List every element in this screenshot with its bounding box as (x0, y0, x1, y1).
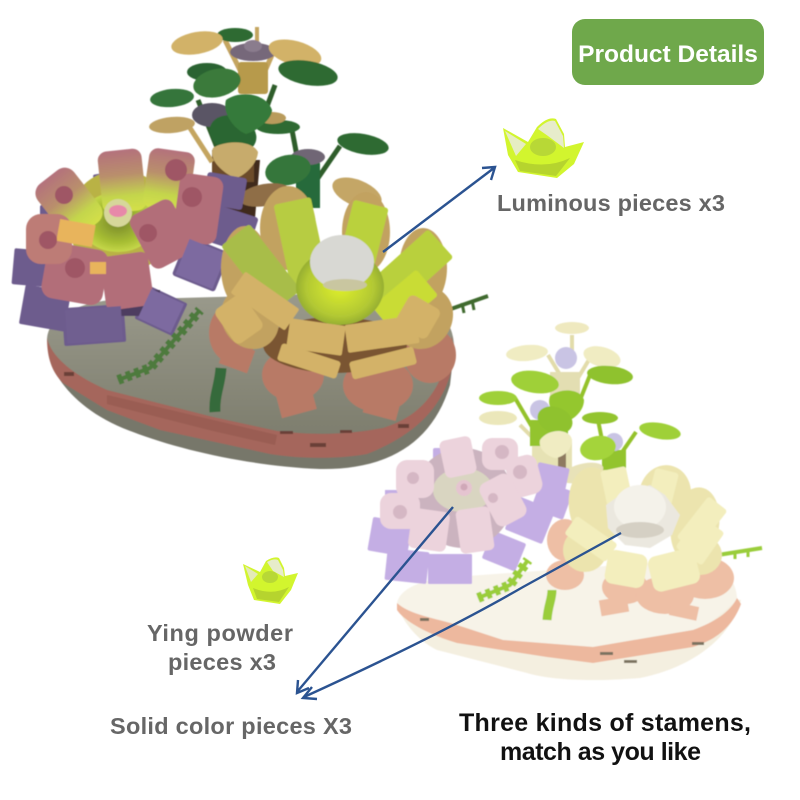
icon: luminous piece top right (503, 118, 584, 178)
label: solid color pieces: Solid color pieces X3 (110, 713, 352, 739)
pastel succulent model (367, 322, 762, 680)
pastel model: upper plant with leaves (479, 322, 682, 487)
pastel model: left pink and lavender succulent (367, 435, 573, 584)
product details badge: Product Details (578, 41, 758, 68)
note: three kinds of stamens: match as you like (500, 738, 701, 766)
pastel model: pot (397, 560, 741, 680)
label: ying powder pieces (147, 620, 293, 675)
note: three kinds of stamens: Three kinds of stamens, (459, 709, 751, 737)
dark model: vines (118, 296, 488, 412)
label: ying powder pieces: pieces x3 (168, 649, 276, 675)
pastel model: vines (478, 548, 762, 620)
pastel model: right cream succulent (546, 461, 734, 621)
dark model: pot (47, 292, 454, 469)
note: three kinds of stamens (459, 709, 751, 766)
purple block highlights (65, 239, 227, 344)
dark model: right glowing succulent (209, 186, 464, 421)
arrow: to luminous piece (383, 167, 495, 252)
dark model: left pink and purple succulent (12, 147, 259, 346)
icon: luminous piece lower left (243, 557, 298, 604)
label: ying powder pieces: Ying powder (147, 620, 293, 646)
arrow: to solid color piece (303, 533, 621, 699)
dark model: upper plant with leaves (148, 27, 390, 230)
dark glowing succulent model (12, 27, 488, 469)
label: luminous pieces: Luminous pieces x3 (497, 190, 725, 216)
arrow: to ying powder piece (297, 507, 453, 693)
product details badge (572, 19, 764, 85)
